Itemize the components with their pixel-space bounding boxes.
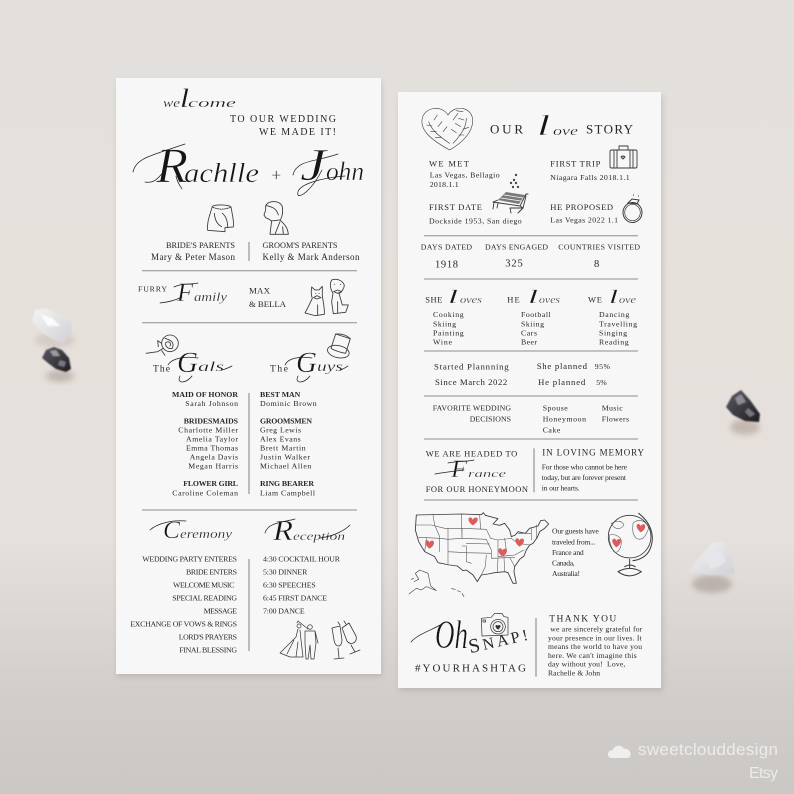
column: we love bbox=[588, 287, 637, 347]
panel: right story card bbox=[398, 92, 661, 688]
text block: planning stats: Started Plannning bbox=[434, 362, 509, 372]
text block: parents: Mary & Peter Mason bbox=[151, 252, 236, 262]
heading: welcome to our wedding: we bbox=[163, 95, 180, 110]
text block: planning stats: 95% bbox=[595, 362, 610, 371]
heading: The Guys: G bbox=[296, 346, 317, 379]
text block: honeymoon: FOR OUR HONEYMOON bbox=[426, 484, 528, 494]
icon: dancing couple bbox=[280, 621, 318, 659]
text block: in loving memory bbox=[542, 448, 644, 493]
list: the guys: Justin Walker bbox=[260, 452, 310, 461]
text block: parents bbox=[151, 241, 360, 262]
stats: days and countries: DAYS DATED bbox=[421, 243, 472, 252]
list: the guys: Dominic Brown bbox=[260, 399, 317, 408]
list: reception schedule: 4:30 COCKTAIL HOUR bbox=[263, 555, 341, 564]
text block: guests traveled bbox=[552, 527, 599, 578]
text block: in loving memory: For those who cannot be here bbox=[542, 462, 628, 471]
text block: furry family: F bbox=[176, 278, 194, 307]
text block: thank you: day without you! Love, bbox=[548, 660, 625, 669]
list: the gals: Sarah Johnson bbox=[185, 399, 238, 408]
text block: first trip: FIRST TRIP bbox=[550, 158, 601, 168]
text block: guests traveled: Canada, bbox=[552, 559, 575, 568]
text block: parents: BRIDE'S PARENTS bbox=[166, 241, 235, 250]
column: he loves: Beer bbox=[521, 338, 537, 347]
heading: The Guys: uys bbox=[317, 360, 344, 375]
icon: diamond ring bbox=[623, 195, 642, 222]
watermark: sweetclouddesign Etsy: sweetclouddesign bbox=[638, 740, 778, 759]
heading: Reception: R bbox=[272, 515, 293, 547]
text block: furry family: FURRY bbox=[138, 285, 167, 294]
list: ceremony order bbox=[130, 555, 237, 654]
list: reception schedule bbox=[263, 555, 341, 616]
heading: Ceremony bbox=[150, 517, 233, 544]
column: we love: ove bbox=[619, 295, 637, 306]
list: the guys: BEST MAN bbox=[260, 390, 301, 399]
text block: thank you: THANK YOU bbox=[549, 614, 616, 624]
list: ceremony order: MESSAGE bbox=[204, 607, 237, 616]
text block: thank you: here. We can't imagine this bbox=[548, 651, 637, 660]
icon: leafy heart bbox=[422, 108, 473, 150]
icon: champagne flutes bbox=[332, 621, 360, 659]
column: she loves: oves bbox=[460, 295, 482, 306]
heading: welcome to our wedding: TO OUR WEDDING bbox=[230, 114, 336, 125]
text block: guests traveled: France and bbox=[552, 548, 584, 557]
icon: groom profile bbox=[264, 202, 288, 234]
heading: The Gals: als bbox=[198, 360, 225, 375]
icon: cat and dog bbox=[305, 279, 348, 316]
text block: honeymoon bbox=[426, 449, 528, 494]
text block: favorite wedding decisions: Cake bbox=[543, 426, 561, 435]
text block: guests traveled: Our guests have bbox=[552, 527, 599, 536]
text block: furry family bbox=[138, 278, 287, 309]
heading: oh snap: SNAP! bbox=[466, 623, 530, 658]
list: the guys: Greg Lewis bbox=[260, 426, 301, 435]
stats: days and countries: 325 bbox=[505, 259, 523, 270]
text block: guests traveled: Australia! bbox=[552, 569, 580, 578]
column: we love: Travelling bbox=[599, 319, 637, 328]
list: the guys: GROOMSMEN bbox=[260, 417, 312, 426]
heading: oh snap bbox=[411, 612, 530, 658]
heading: welcome to our wedding: come bbox=[188, 95, 236, 110]
text block: he proposed: HE PROPOSED bbox=[550, 202, 613, 212]
stats: days and countries: 8 bbox=[594, 259, 599, 270]
heading: couple names: + bbox=[270, 165, 282, 185]
icon: globe with hearts bbox=[608, 513, 652, 576]
list: reception schedule: 6:45 FIRST DANCE bbox=[263, 594, 327, 603]
text block: thank you: we are sincerely grateful for bbox=[550, 624, 643, 633]
panel: left program card bbox=[116, 78, 381, 674]
list: ceremony order: EXCHANGE OF VOWS & RINGS bbox=[130, 619, 237, 628]
column: he loves: Cars bbox=[521, 329, 537, 338]
text block: planning stats: 5% bbox=[596, 378, 607, 387]
text block: planning stats: She planned bbox=[537, 361, 588, 371]
text block: first date: Dockside 1953, San diego bbox=[429, 217, 522, 226]
heading: welcome to our wedding: l bbox=[180, 84, 189, 113]
list: ceremony order: WELCOME MUSIC bbox=[173, 581, 234, 590]
column: she loves: Wine bbox=[433, 338, 453, 347]
text block: thank you: means the world to have you bbox=[548, 642, 642, 651]
text block: honeymoon: rance bbox=[468, 469, 507, 480]
column: she loves: SHE bbox=[425, 295, 442, 305]
icon: park bench bbox=[493, 192, 528, 213]
heading: couple names: ohn bbox=[326, 157, 364, 186]
column: we love: l bbox=[609, 287, 618, 308]
text block: he proposed: Las Vegas 2022 1.1 bbox=[550, 216, 618, 225]
list: ceremony order: SPECIAL READING bbox=[172, 594, 237, 603]
icon: bride and veil bbox=[207, 205, 234, 232]
list: the gals: Caroline Coleman bbox=[172, 488, 238, 497]
heading: Ceremony: eremony bbox=[180, 527, 233, 541]
list: the gals: FLOWER GIRL bbox=[183, 479, 238, 488]
text block: favorite wedding decisions: Honeymoon bbox=[543, 415, 586, 424]
text block: thank you: your presence in our lives. It bbox=[548, 633, 643, 642]
column: we love: WE bbox=[588, 295, 602, 305]
text block: honeymoon: WE ARE HEADED TO bbox=[426, 449, 517, 459]
list: the gals: Angela Davis bbox=[190, 452, 238, 461]
stats: days and countries: DAYS ENGAGED bbox=[485, 243, 548, 252]
text block: planning stats: Since March 2022 bbox=[435, 377, 507, 387]
card shadows bbox=[117, 81, 663, 691]
heading: our love story bbox=[490, 111, 634, 142]
heading: The Gals bbox=[153, 346, 232, 382]
list: the guys: Brett Martin bbox=[260, 444, 306, 453]
text block: guests traveled: traveled from... bbox=[552, 537, 595, 546]
text block: parents: GROOM'S PARENTS bbox=[262, 241, 338, 250]
list: the guys bbox=[260, 390, 317, 497]
list: ceremony order: WEDDING PARTY ENTERES bbox=[142, 555, 237, 564]
column: he loves: oves bbox=[539, 295, 560, 306]
list: the guys: Liam Campbell bbox=[260, 488, 316, 497]
heading: Ceremony: C bbox=[163, 517, 180, 544]
heading: welcome to our wedding: WE MADE IT! bbox=[259, 127, 336, 138]
text block: in loving memory: today, but are forever present bbox=[542, 473, 627, 482]
text block: in loving memory: IN LOVING MEMORY bbox=[542, 448, 644, 458]
heading: The Guys bbox=[270, 346, 348, 382]
icon: hearts dots bbox=[510, 174, 519, 188]
map: USA with state lines and hearts bbox=[409, 513, 549, 597]
heading: The Gals: G bbox=[177, 346, 198, 379]
list: reception schedule: 7:00 DANCE bbox=[263, 607, 305, 616]
heading: The Guys: The bbox=[270, 365, 288, 375]
column: she loves: Cooking bbox=[433, 310, 464, 319]
stones: right dark and white stones bbox=[688, 390, 760, 593]
column: he loves: Football bbox=[521, 310, 552, 319]
list: ceremony order: BRIDE ENTERS bbox=[186, 568, 237, 577]
text block: first trip bbox=[550, 158, 630, 182]
text block: favorite wedding decisions: Flowers bbox=[602, 415, 629, 424]
text block: furry family: amily bbox=[194, 289, 227, 304]
heading: couple names: J bbox=[300, 139, 329, 190]
text block: we met: Las Vegas, Bellagio bbox=[430, 170, 500, 179]
list: the guys: Alex Evans bbox=[260, 435, 301, 444]
column: she loves: Skiing bbox=[433, 319, 456, 328]
icon: rose bbox=[146, 335, 178, 355]
text block: thank you bbox=[548, 614, 643, 678]
text block: planning stats bbox=[434, 361, 610, 387]
icon: top hat bbox=[326, 334, 350, 360]
heading: our love story: ove bbox=[553, 123, 578, 138]
list: reception schedule: 5:30 DINNER bbox=[263, 568, 308, 577]
column: we love: Singing bbox=[599, 329, 627, 338]
list: the gals: Charlotte Miller bbox=[178, 426, 238, 435]
list: reception schedule: 6:30 SPEECHES bbox=[263, 581, 316, 590]
text block: honeymoon: F bbox=[450, 456, 468, 483]
column: he loves: HE bbox=[507, 295, 520, 305]
text block: he proposed bbox=[550, 202, 618, 225]
heading: Reception: eception bbox=[293, 529, 345, 543]
text block: we met: 2018.1.1 bbox=[430, 180, 459, 189]
text block: we met bbox=[429, 158, 500, 189]
column: she loves bbox=[425, 287, 482, 347]
heading: our love story: l bbox=[537, 111, 550, 142]
text block: first date bbox=[429, 202, 522, 226]
icon: suitcase bbox=[610, 146, 637, 168]
column: he loves: Skiing bbox=[521, 319, 544, 328]
text block: planning stats: He planned bbox=[538, 377, 586, 387]
text block: in loving memory: in our hearts. bbox=[542, 484, 580, 493]
text block: furry family: & BELLA bbox=[249, 299, 287, 309]
text block: furry family: MAX bbox=[249, 285, 271, 295]
list: the guys: Michael Allen bbox=[260, 461, 311, 470]
text block: favorite wedding decisions: Music bbox=[602, 404, 623, 413]
text block: thank you: Rachelle & John bbox=[548, 669, 600, 678]
column: he loves: l bbox=[528, 287, 538, 308]
heading: Reception bbox=[265, 515, 350, 547]
watermark: sweetclouddesign Etsy: Etsy bbox=[749, 765, 778, 782]
heading: our love story: STORY bbox=[586, 121, 634, 136]
list: the gals bbox=[172, 390, 238, 497]
stats: days and countries: COUNTRIES VISITED bbox=[558, 243, 640, 252]
text block: favorite wedding decisions: Spouse bbox=[543, 404, 568, 413]
list: the gals: Megan Harris bbox=[188, 461, 238, 470]
list: ceremony order: FINAL BLESSING bbox=[179, 645, 237, 654]
list: the guys: RING BEARER bbox=[260, 479, 314, 488]
column: she loves: l bbox=[448, 287, 458, 308]
list: the gals: BRIDESMAIDS bbox=[184, 417, 238, 426]
list: the gals: Amelia Taylor bbox=[186, 435, 238, 444]
column: he loves bbox=[507, 287, 560, 347]
text block: favorite wedding decisions: FAVORITE WEDDING bbox=[433, 403, 511, 412]
text block: favorite wedding decisions: DECISIONS bbox=[470, 414, 511, 423]
column: we love: Reading bbox=[599, 338, 629, 347]
heading: couple names bbox=[133, 137, 364, 196]
column: she loves: Painting bbox=[433, 329, 464, 338]
text block: parents: Kelly & Mark Anderson bbox=[262, 252, 360, 262]
heading: couple names: R bbox=[155, 137, 188, 193]
column: we love: Dancing bbox=[599, 310, 629, 319]
text: hashtag: #YOURHASHTAG bbox=[415, 663, 526, 675]
heading: welcome to our wedding bbox=[163, 84, 336, 138]
heading: The Gals: The bbox=[153, 365, 170, 375]
list: the gals: MAID OF HONOR bbox=[172, 390, 238, 399]
text block: first date: FIRST DATE bbox=[429, 202, 482, 212]
stones: left white and dark stones bbox=[32, 308, 75, 382]
text block: first trip: Niagara Falls 2018.1.1 bbox=[550, 173, 630, 182]
heading: oh snap: Oh bbox=[435, 612, 468, 657]
heading: our love story: OUR bbox=[490, 121, 523, 136]
icon: camera bbox=[481, 613, 508, 636]
heading: couple names: achlle bbox=[184, 158, 259, 188]
text block: favorite wedding decisions bbox=[433, 403, 629, 435]
stats: days and countries: 1918 bbox=[435, 259, 458, 270]
watermark: sweetclouddesign Etsy bbox=[608, 740, 778, 782]
list: the gals: Emma Thomas bbox=[186, 444, 238, 453]
stats: days and countries bbox=[421, 243, 640, 270]
list: ceremony order: LORD'S PRAYERS bbox=[179, 632, 237, 641]
text block: we met: WE MET bbox=[429, 158, 470, 168]
